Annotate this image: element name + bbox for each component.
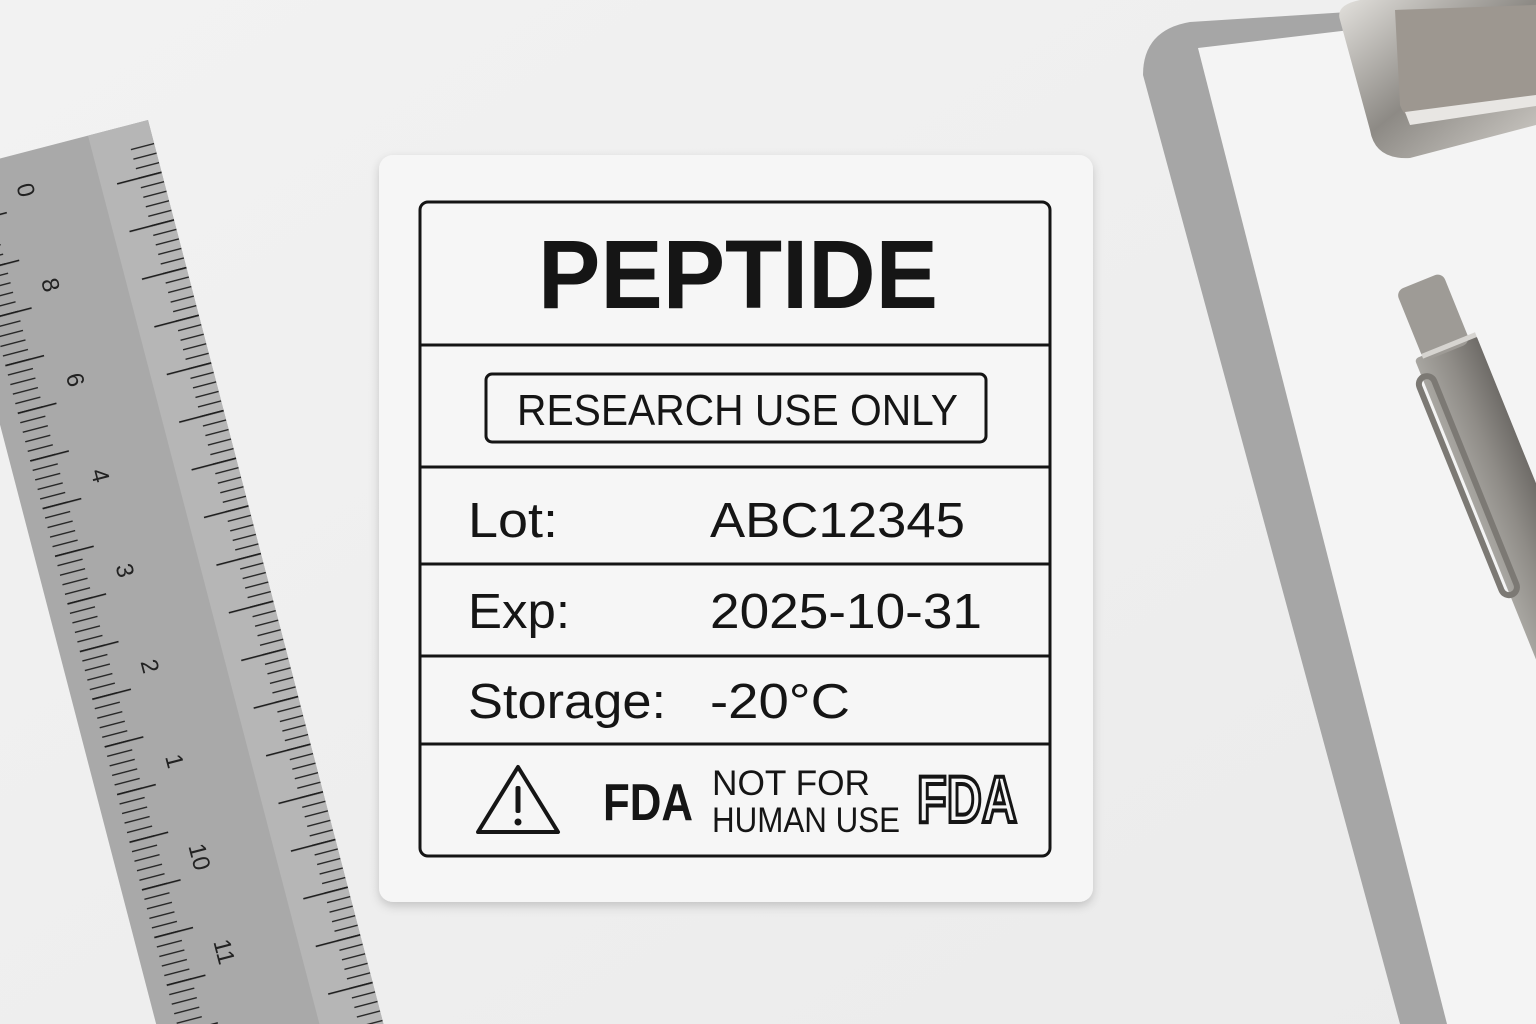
title: PEPTIDE xyxy=(538,220,938,329)
pen xyxy=(1398,274,1536,660)
lot row: ABC12345 xyxy=(710,494,965,548)
ruler: 1 xyxy=(159,751,189,771)
storage row xyxy=(468,675,850,729)
ruler xyxy=(0,120,390,1024)
exp row xyxy=(468,585,982,639)
FDA logo: FDA xyxy=(917,762,1017,836)
lot row: Lot: xyxy=(468,494,558,548)
ruler: 10 xyxy=(182,841,215,873)
ruler: 4 xyxy=(85,466,114,486)
ruler: 0 xyxy=(10,180,40,200)
clipboard clip xyxy=(1339,0,1536,158)
not for human use: NOT FOR xyxy=(712,764,870,803)
ruler: 2 xyxy=(135,656,164,676)
ruler: 6 xyxy=(60,370,89,390)
ruler: 8 xyxy=(35,275,65,295)
storage row: -20°C xyxy=(710,675,850,729)
clipboard xyxy=(1143,0,1536,1024)
label card xyxy=(379,155,1093,902)
exp row: 2025-10-31 xyxy=(710,585,982,639)
ruler: 11 xyxy=(207,936,240,967)
lot row xyxy=(468,494,965,548)
exp row: Exp: xyxy=(468,585,570,639)
not for human use xyxy=(712,764,900,840)
FDA text: FDA xyxy=(603,774,693,832)
label inner frame xyxy=(420,202,1050,856)
storage row: Storage: xyxy=(468,675,666,729)
ruler: 3 xyxy=(110,561,139,580)
research use only badge xyxy=(486,374,986,442)
research use only badge: RESEARCH USE ONLY xyxy=(517,386,958,435)
not for human use: HUMAN USE xyxy=(712,801,900,840)
icon: warning triangle xyxy=(478,767,558,832)
